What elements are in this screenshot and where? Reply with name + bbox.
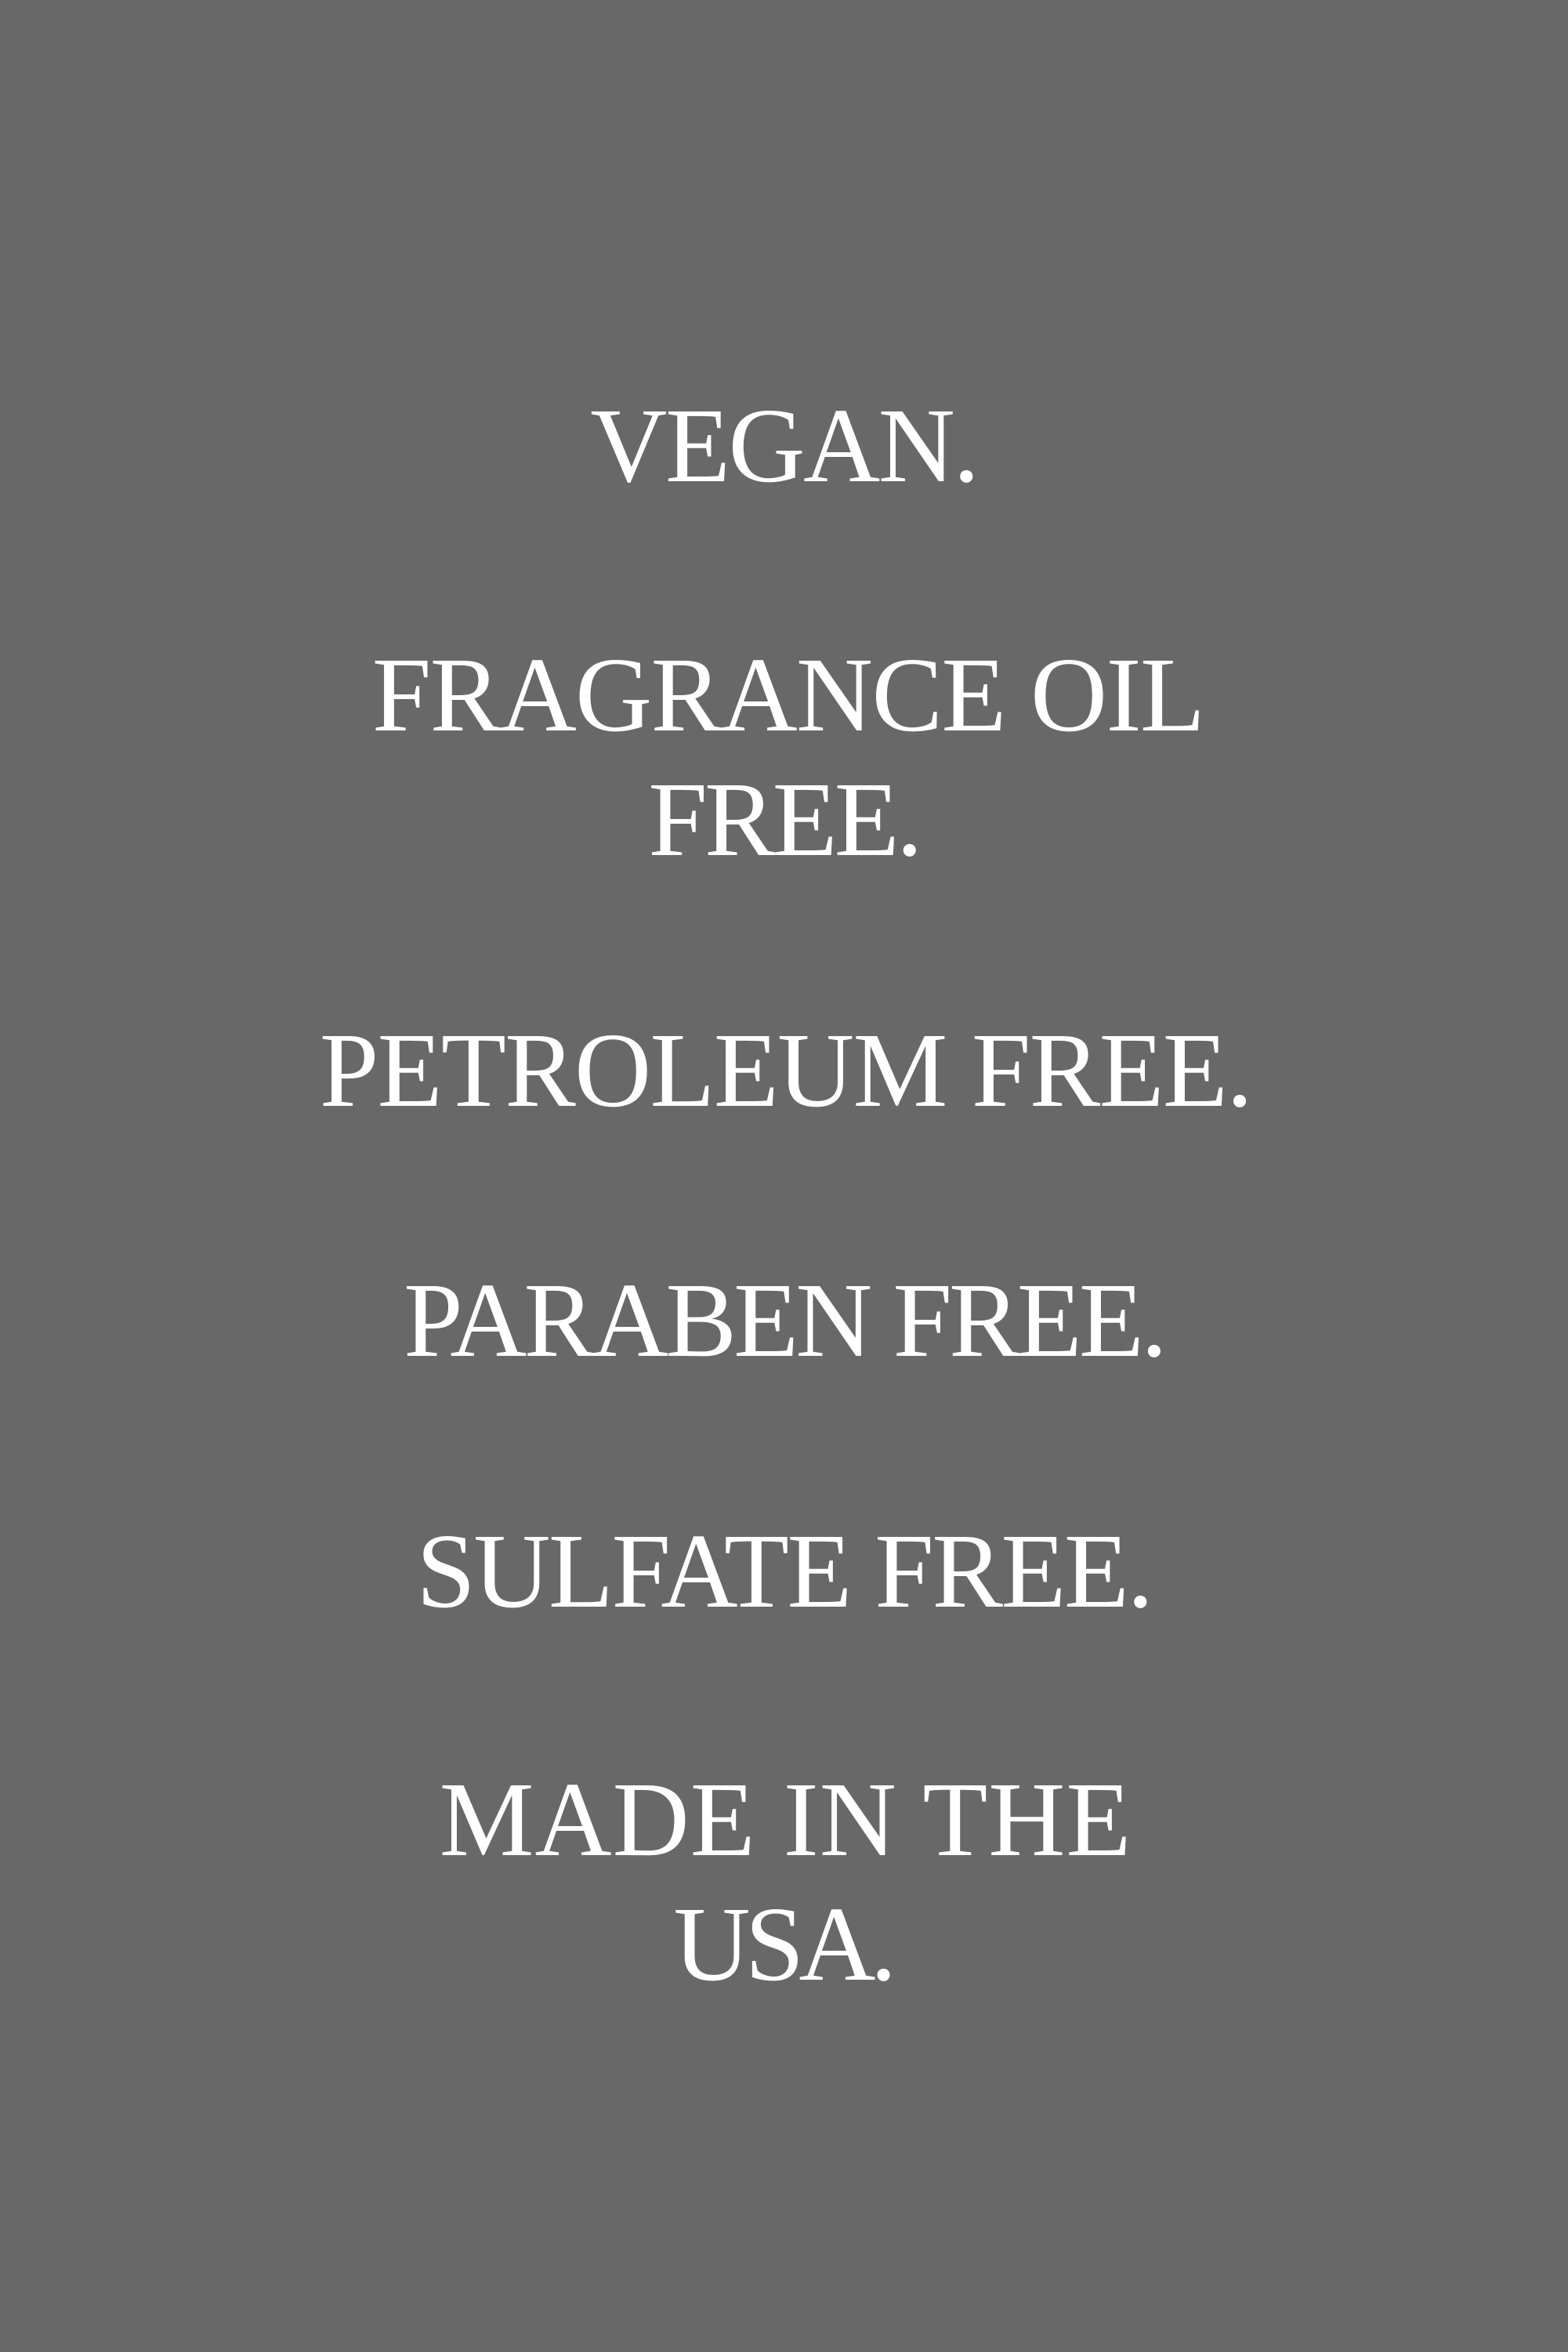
text: made in the usa, line 1: MADE IN THE	[440, 1761, 1132, 1879]
text: made in the usa, line 2: USA.	[673, 1886, 892, 2003]
text: fragrance oil free, line 2: FREE.	[648, 761, 920, 879]
text: vegan: VEGAN.	[590, 387, 978, 505]
text: sulfate free: SULFATE FREE.	[416, 1513, 1152, 1630]
text: petroleum free: PETROLEUM FREE.	[320, 1012, 1251, 1129]
text: fragrance oil free, line 1: FRAGRANCE OIL	[372, 636, 1204, 754]
text: paraben free: PARABEN FREE.	[404, 1262, 1164, 1379]
